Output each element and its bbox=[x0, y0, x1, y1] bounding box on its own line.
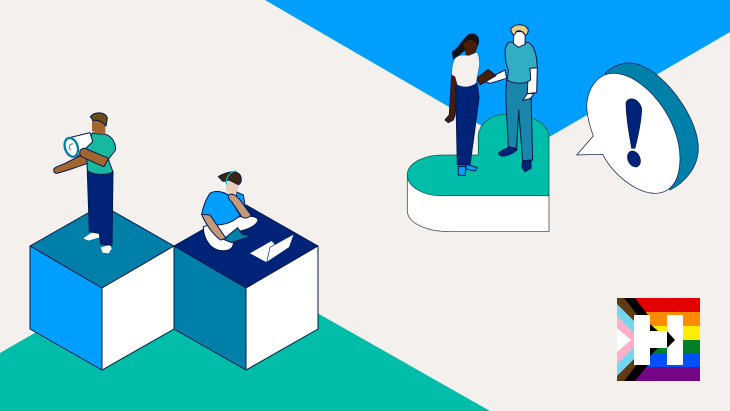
heart platform bbox=[407, 114, 549, 232]
speech bubble with exclamation mark bbox=[577, 63, 698, 193]
pride flag logo bbox=[617, 298, 700, 381]
right cube bbox=[174, 205, 318, 370]
man bbox=[483, 25, 537, 172]
person with megaphone bbox=[54, 113, 116, 253]
woman bbox=[445, 34, 496, 176]
seated person with laptop bbox=[202, 171, 294, 262]
left cube bbox=[30, 205, 174, 370]
blue background shape bbox=[265, 0, 730, 151]
two people talking bbox=[445, 25, 537, 176]
teal background shape bbox=[0, 242, 490, 411]
